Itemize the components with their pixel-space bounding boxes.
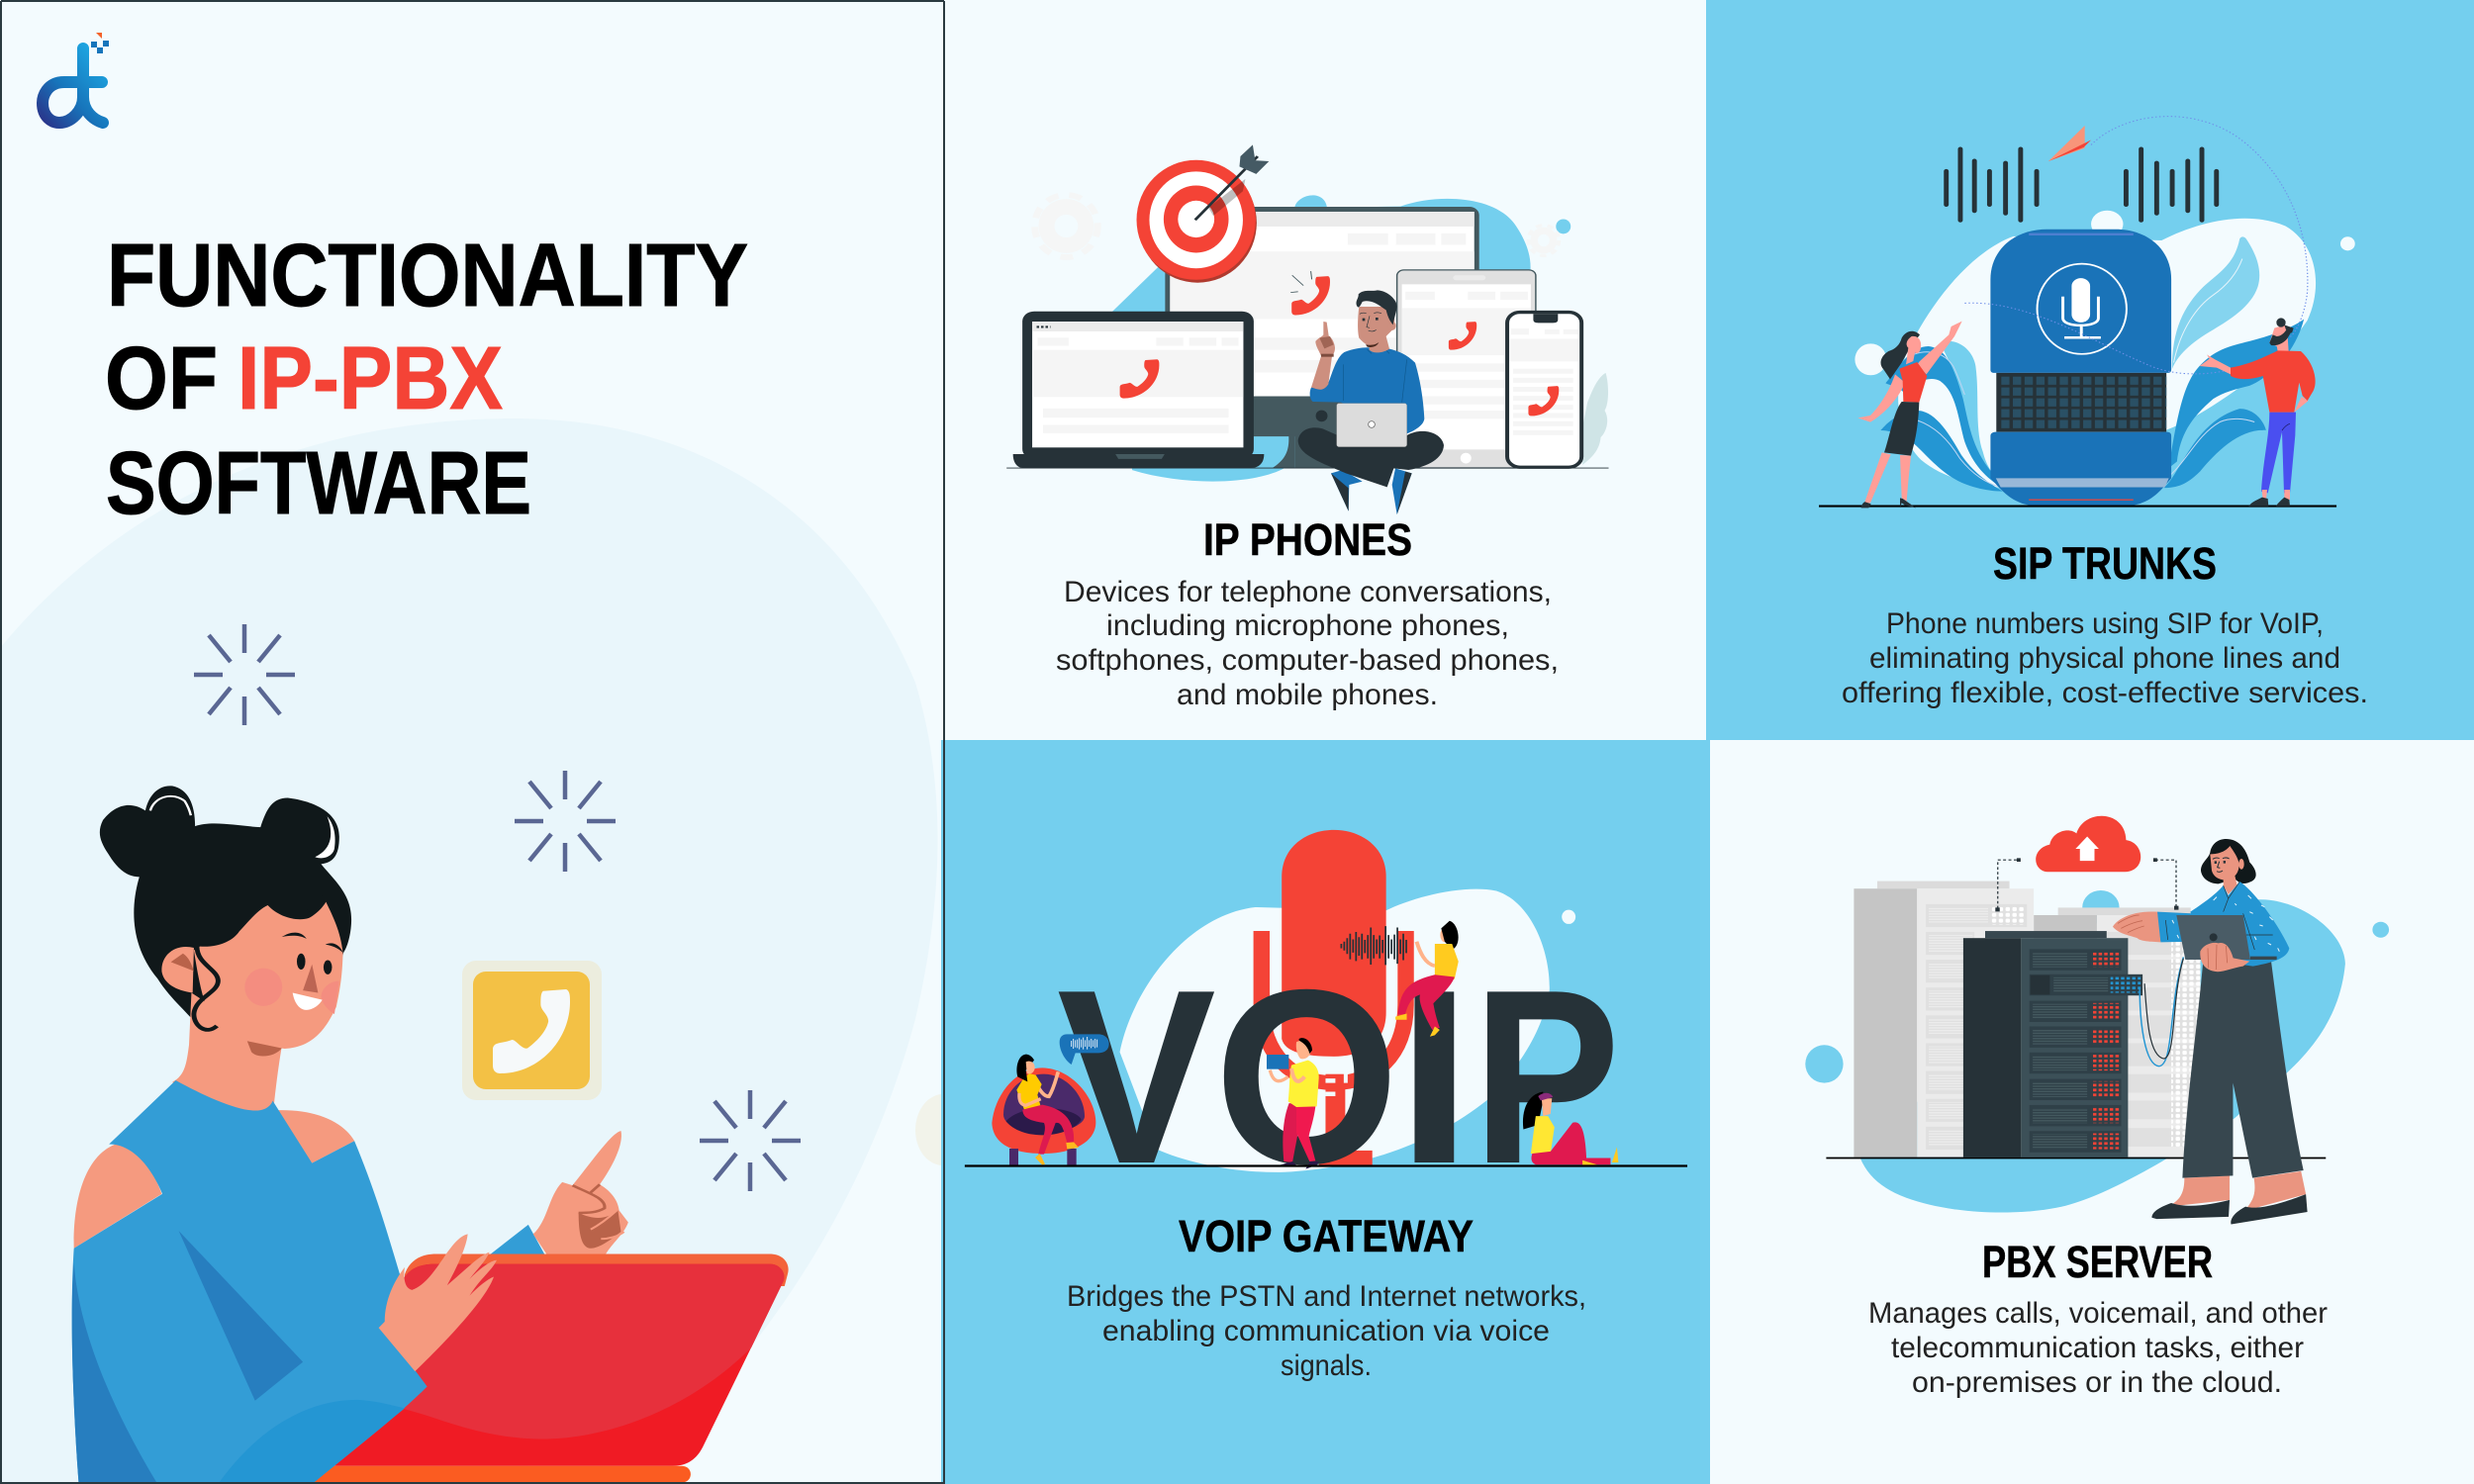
figure: technician legs	[2151, 960, 2308, 1224]
icon: yellow phone tile	[462, 961, 602, 1100]
text block: IP Phones description: softphones, computer-based phones,	[1056, 644, 1559, 677]
word art: VOIP letters: I	[1396, 938, 1473, 1215]
text block: SIP Trunks description: Phone numbers using SIP for VoIP,	[1886, 607, 2324, 640]
figure: person holding tablet	[1267, 1038, 1319, 1169]
text block: IP Phones description: and mobile phones.	[1177, 679, 1438, 711]
heading: SIP Trunks: SIP TRUNKS	[1993, 538, 2217, 589]
figure: technician upper body with tablet	[2113, 839, 2289, 972]
logo	[43, 33, 109, 123]
title: IP-PBX	[238, 329, 503, 428]
text block: PBX Server description: Manages calls, voicemail, and other	[1868, 1297, 2328, 1330]
rack: right background server	[2034, 907, 2201, 1158]
rack: left background server	[1854, 881, 2034, 1158]
panel: VoIP gateway	[941, 740, 1710, 1484]
word art: VOIP letters: O	[1214, 939, 1399, 1216]
figure: person in chair with speech bubble	[992, 1034, 1109, 1165]
heading: IP Phones: IP PHONES	[1203, 514, 1412, 565]
connector lines	[1998, 860, 2176, 908]
illustration: microphone backdrop	[1120, 830, 1575, 1172]
icon: sparkle burst 1	[194, 624, 295, 725]
panel: SIP trunks	[1706, 0, 2474, 740]
illustration: people on the letters	[965, 921, 1687, 1166]
heading: VoIP Gateway: VOIP GATEWAY	[1179, 1211, 1474, 1261]
text block: VoIP Gateway description: Bridges the PSTN and Internet networks,	[1067, 1280, 1586, 1313]
title: SOFTWARE	[106, 434, 531, 533]
illustration: smart speaker backdrop	[1819, 117, 2355, 507]
figure: man with laptop	[1298, 290, 1444, 514]
text block: PBX Server description: on-premises or in the cloud.	[1912, 1366, 2282, 1399]
leaves: right	[2164, 236, 2304, 488]
figure: woman pointing	[1857, 322, 1962, 508]
figure: man gesturing	[2200, 318, 2316, 507]
illustration: devices	[1006, 144, 1609, 482]
icon: cloud upload	[2036, 816, 2141, 872]
word art: VOIP letters: V	[1057, 939, 1216, 1216]
text block: IP Phones description: Devices for telephone conversations,	[1064, 576, 1552, 608]
panel: PBX server	[1710, 740, 2474, 1484]
word art: VOIP letters: P	[1473, 939, 1620, 1216]
heading: PBX Server: PBX SERVER	[1982, 1237, 2213, 1287]
icon: sparkle burst 2	[515, 771, 616, 872]
title	[105, 227, 748, 533]
word art: VOIP letters	[1057, 938, 1620, 1216]
panel border	[1, 1, 944, 1483]
panel: IP phones	[945, 0, 1706, 740]
title: OF	[105, 329, 218, 428]
figure: person sitting on floor	[1523, 1092, 1618, 1166]
text block: SIP Trunks description: offering flexible, cost-effective services.	[1842, 677, 2368, 709]
icon: sparkle burst 3	[700, 1090, 801, 1191]
text block: IP Phones description: including microphone phones,	[1106, 609, 1509, 642]
text block: VoIP Gateway description: signals.	[1281, 1349, 1372, 1382]
illustration: server racks	[1805, 816, 2389, 1224]
rack: front server	[1963, 931, 2183, 1158]
text block: PBX Server description: telecommunication tasks, either	[1891, 1332, 2304, 1364]
panel: left title column	[0, 0, 945, 1484]
text block: VoIP Gateway description: enabling communication via voice	[1102, 1315, 1550, 1347]
leaves: left	[1855, 341, 2003, 492]
figure: person seated on the I	[1341, 921, 1459, 1037]
text block: VoIP Gateway description	[1067, 1280, 1586, 1382]
illustration: woman with laptop	[72, 786, 789, 1484]
title: FUNCTIONALITY	[107, 227, 748, 325]
text block: PBX Server description	[1868, 1297, 2328, 1399]
text block: SIP Trunks description: eliminating physical phone lines and	[1869, 642, 2340, 675]
text block: SIP Trunks description	[1842, 607, 2368, 709]
text block: IP Phones description	[1056, 576, 1559, 711]
